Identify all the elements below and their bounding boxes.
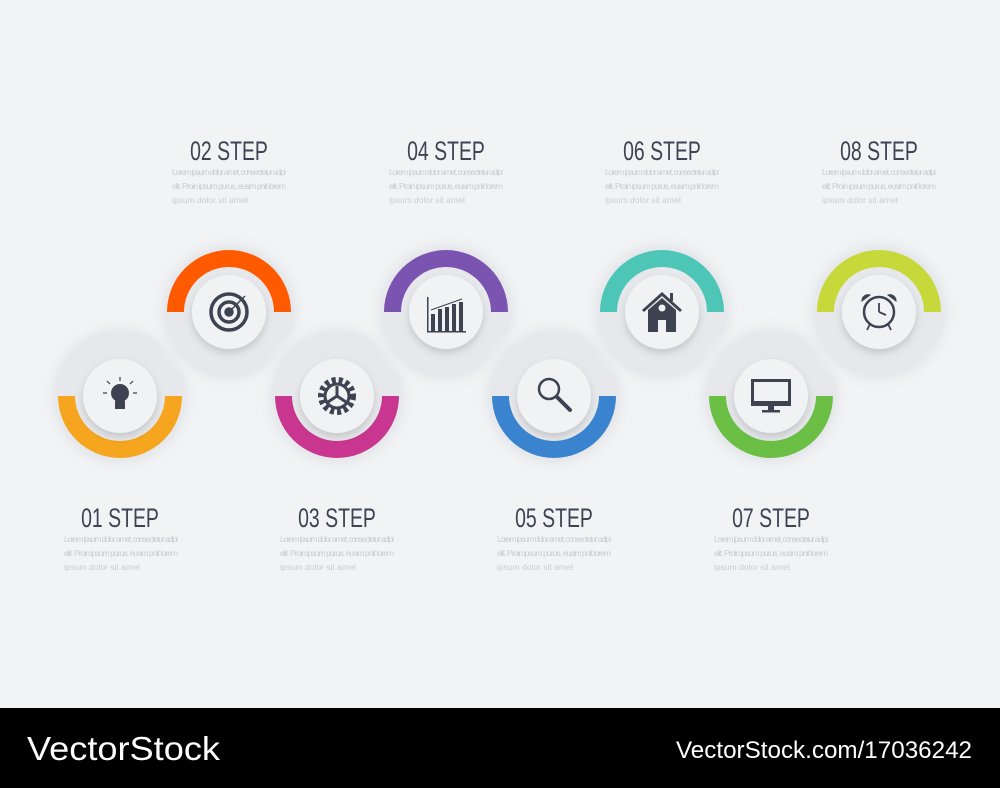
step 04 [366,232,526,392]
body text top: Lorem ipsum dolor amet, consectetur adipi [389,167,503,177]
titles top row: 02 STEP [190,136,268,166]
icon: alarm clock [862,295,896,330]
body text bottom: ipsum dolor sit amet [497,562,574,572]
footer bar [0,708,1000,788]
body text top: ipsum dolor sit amet [605,195,682,205]
body text bottom: Lorem ipsum dolor amet, consectetur adipi [714,534,828,544]
icon: gear [321,380,353,412]
body text top [172,167,936,205]
step 02 [149,232,309,392]
titles top row: 04 STEP [407,136,485,166]
titles top row [190,136,918,166]
body text bottom: ipsum dolor sit amet [64,562,141,572]
body text bottom: ipsum dolor sit amet [280,562,357,572]
titles bottom row: 01 STEP [81,503,159,533]
titles bottom row: 07 STEP [732,503,810,533]
icon: magnifier [539,379,570,410]
icon: bar chart [427,297,466,332]
body text bottom: elit. Proin ipsum purus, eusim pnit lorem [64,548,178,558]
step 08 [799,232,959,392]
body text top: elit. Proin ipsum purus, eusim pnit lorem [605,181,719,191]
icon: monitor [751,379,791,412]
body text top: elit. Proin ipsum purus, eusim pnit lorem [389,181,503,191]
icon: house [642,292,682,332]
body text bottom: elit. Proin ipsum purus, eusim pnit lorem [497,548,611,558]
body text top: Lorem ipsum dolor amet, consectetur adipi [605,167,719,177]
step 06 [582,232,742,392]
icon: target [211,294,247,330]
body text top: elit. Proin ipsum purus, eusim pnit lorem [822,181,936,191]
step 03 [257,316,417,476]
body text bottom [64,534,828,572]
titles bottom row [81,503,810,533]
body text bottom: Lorem ipsum dolor amet, consectetur adipi [64,534,178,544]
body text top: Lorem ipsum dolor amet, consectetur adipi [172,167,286,177]
titles top row: 08 STEP [840,136,918,166]
body text bottom: elit. Proin ipsum purus, eusim pnit lorem [714,548,828,558]
step 01 [40,316,200,476]
body text bottom: ipsum dolor sit amet [714,562,791,572]
icon: light bulb [103,377,137,409]
step 07 [691,316,851,476]
body text bottom: Lorem ipsum dolor amet, consectetur adipi [497,534,611,544]
body text top: ipsum dolor sit amet [172,195,249,205]
body text bottom: Lorem ipsum dolor amet, consectetur adipi [280,534,394,544]
body text top: Lorem ipsum dolor amet, consectetur adipi [822,167,936,177]
footer bar: VectorStock [27,730,221,767]
body text top: ipsum dolor sit amet [389,195,466,205]
titles top row: 06 STEP [623,136,701,166]
titles bottom row: 03 STEP [298,503,376,533]
body text top: ipsum dolor sit amet [822,195,899,205]
body text top: elit. Proin ipsum purus, eusim pnit lorem [172,181,286,191]
step 05 [474,316,634,476]
body text bottom: elit. Proin ipsum purus, eusim pnit lorem [280,548,394,558]
footer bar: VectorStock.com/17036242 [676,737,972,764]
titles bottom row: 05 STEP [515,503,593,533]
